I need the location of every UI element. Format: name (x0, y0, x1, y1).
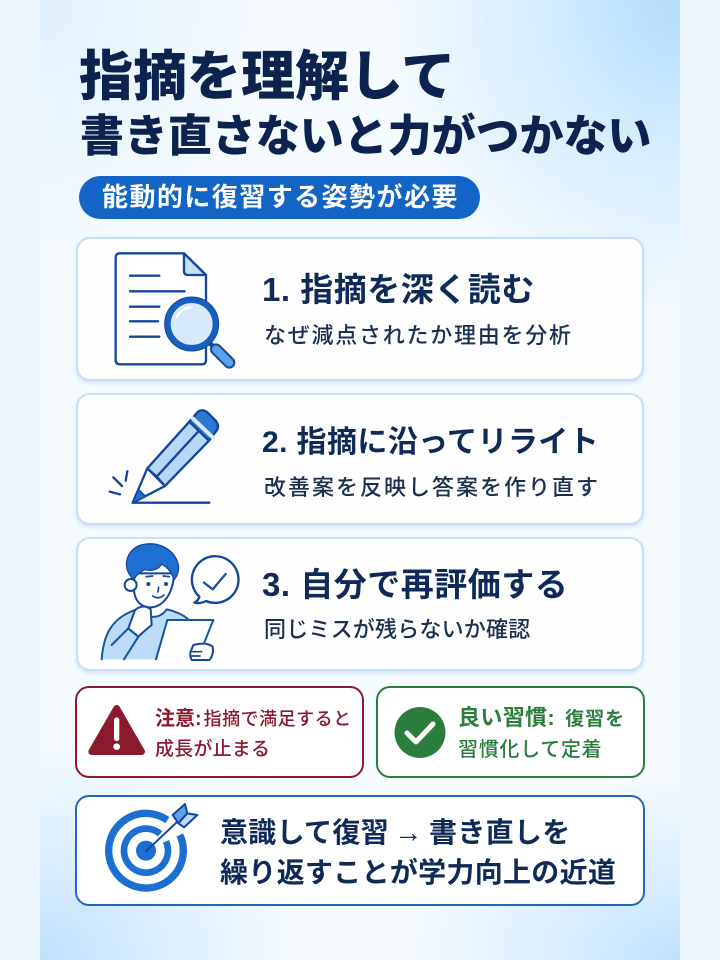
subtitle pill (79, 176, 480, 219)
step 1 heading: 1. 指摘を深く読む (262, 271, 535, 308)
warning text: 注意:指摘で満足すると (155, 708, 352, 730)
panel: step 2 (76, 393, 644, 525)
title (79, 47, 651, 161)
icon: warning triangle (92, 708, 142, 752)
good habit text (458, 705, 625, 761)
icon: document with magnifier (116, 253, 229, 364)
panel: good habit (376, 686, 645, 778)
icon: pencil (110, 410, 218, 503)
panel: step 1 (76, 237, 644, 381)
panel: conclusion (75, 795, 645, 906)
step 2 text: 改善案を反映し答案を作り直す (264, 475, 600, 500)
step 1 text: なぜ減点されたか理由を分析 (264, 323, 573, 348)
good habit text: 習慣化して定着 (458, 739, 602, 761)
title: 指摘を理解して (79, 47, 455, 107)
step 3 text: 同じミスが残らないか確認 (264, 617, 530, 642)
title: 書き直さないと力がつかない (80, 112, 651, 161)
conclusion text (220, 817, 616, 888)
step 2 heading: 2. 指摘に沿ってリライト (262, 426, 599, 459)
conclusion text: 繰り返すことが学力向上の近道 (220, 857, 616, 888)
good habit text: 良い習慣: 復習を (458, 705, 625, 730)
icon: target with arrow (109, 804, 197, 888)
warning text (155, 708, 352, 760)
panel: step 3 (76, 537, 644, 671)
warning text: 成長が止まる (155, 739, 270, 760)
icon: person with checkmark bubble (102, 544, 239, 660)
subtitle pill: 能動的に復習する姿勢が必要 (102, 182, 459, 212)
step 3 heading: 3. 自分で再評価する (262, 566, 568, 603)
conclusion text: 意識して復習 → 書き直しを (220, 817, 571, 848)
icon: green check circle (394, 707, 446, 758)
panel: warning (75, 686, 364, 778)
